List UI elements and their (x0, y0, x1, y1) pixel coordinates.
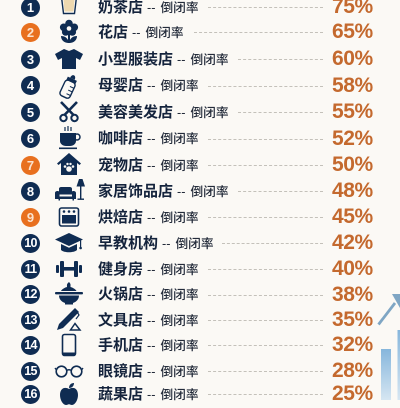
row 7: pet shop: 宠物店 -- 倒闭率 (98, 156, 199, 174)
row 13: stationery shop: 35% (332, 308, 373, 331)
row 12: hot pot: 火锅店 -- 倒闭率 (98, 286, 199, 303)
row 11: gym: 40% (332, 257, 373, 280)
row 3: small clothing shop (21, 47, 373, 70)
row 10: early education: 早教机构 -- 倒闭率 (98, 234, 214, 252)
row 9: bakery: 烘焙店 -- 倒闭率 (98, 208, 199, 226)
row 5: beauty salon: 5 (27, 104, 34, 120)
row 14: mobile phone shop: 14 (24, 338, 37, 352)
row 4: maternity and baby shop: 58% (332, 74, 373, 96)
row 12: hot pot: 12 (24, 287, 37, 301)
bar 1 (381, 349, 391, 400)
row 11: gym: 11 (25, 262, 36, 276)
row 5: beauty salon: 55% (332, 100, 373, 123)
row 2: flower shop: 花店 -- 倒闭率 (98, 24, 184, 40)
row 4: maternity and baby shop (21, 74, 373, 99)
row 2: flower shop (21, 20, 373, 43)
row 6: coffee shop: 6 (27, 131, 34, 146)
row 11: gym (21, 257, 373, 280)
row 9: bakery (21, 205, 373, 228)
row 16: fruit and vegetable shop: 25% (332, 382, 373, 405)
row 9: bakery: 45% (332, 205, 373, 228)
row 8: home goods shop: 8 (27, 184, 34, 198)
row 10: early education: 42% (332, 231, 373, 254)
row 14: mobile phone shop: 手机店 -- 倒闭率 (98, 336, 199, 354)
row 16: fruit and vegetable shop: 蔬果店 -- 倒闭率 (98, 386, 199, 402)
row 12: hot pot: 38% (332, 282, 373, 306)
row 5: beauty salon (21, 100, 373, 123)
row 6: coffee shop: 52% (332, 126, 373, 150)
row 7: pet shop: 50% (332, 153, 373, 176)
row 16: fruit and vegetable shop: 16 (24, 386, 37, 400)
row 4: maternity and baby shop: 4 (27, 78, 34, 93)
row 11: gym: 健身房 -- 倒闭率 (98, 260, 199, 278)
bar 2 (398, 330, 400, 400)
row 2: flower shop: 65% (332, 20, 373, 43)
row 6: coffee shop: 咖啡店 -- 倒闭率 (98, 130, 199, 147)
row 6: coffee shop (21, 126, 373, 150)
row 9: bakery: 9 (27, 210, 34, 224)
row 3: small clothing shop: 小型服装店 -- 倒闭率 (98, 50, 229, 68)
row 12: hot pot (21, 282, 373, 306)
row 13: stationery shop (21, 308, 373, 331)
row 7: pet shop (21, 153, 373, 176)
row 13: stationery shop: 文具店 -- 倒闭率 (98, 312, 199, 328)
row 7: pet shop: 7 (27, 158, 34, 172)
row 10: early education (21, 231, 373, 254)
row 15: optical shop (21, 359, 373, 382)
arrow (378, 294, 400, 324)
row 8: home goods shop: 家居饰品店 -- 倒闭率 (98, 182, 229, 200)
row 14: mobile phone shop (21, 333, 373, 356)
row 3: small clothing shop: 60% (332, 47, 373, 70)
row 13: stationery shop: 13 (24, 312, 37, 326)
row 14: mobile phone shop: 32% (332, 333, 373, 356)
row 1: milk tea shop (21, 0, 373, 18)
growth chart: bars and arrow (378, 294, 400, 400)
row 15: optical shop: 15 (24, 364, 37, 378)
row 3: small clothing shop: 3 (27, 52, 34, 66)
row 15: optical shop: 眼镜店 -- 倒闭率 (98, 362, 199, 380)
row 10: early education: 10 (24, 236, 37, 250)
row 8: home goods shop: 48% (332, 179, 373, 202)
row 2: flower shop: 2 (27, 24, 34, 40)
row 15: optical shop: 28% (332, 359, 373, 382)
row 4: maternity and baby shop: 母婴店 -- 倒闭率 (98, 77, 199, 94)
row 8: home goods shop (21, 179, 373, 202)
row 5: beauty salon: 美容美发店 -- 倒闭率 (98, 104, 229, 120)
row 16: fruit and vegetable shop (21, 382, 373, 405)
